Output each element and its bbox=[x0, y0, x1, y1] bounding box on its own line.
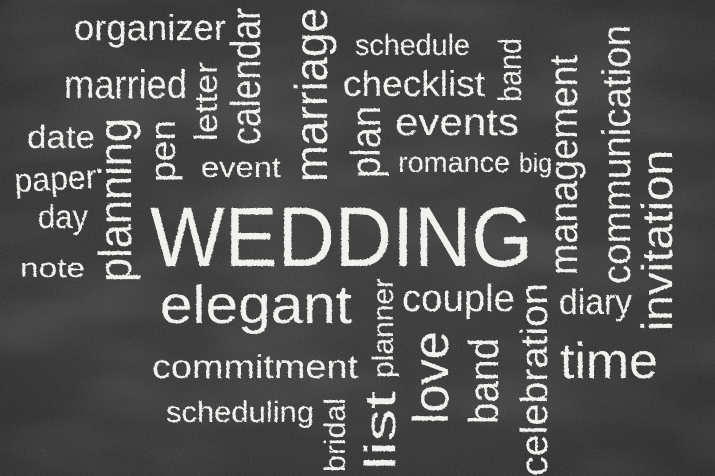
word: married: married bbox=[64, 63, 187, 107]
word: time: time bbox=[560, 333, 658, 389]
word: elegant: elegant bbox=[160, 275, 352, 335]
word: band (vertical, bottom): band bbox=[460, 338, 507, 424]
word: management (vertical): management bbox=[542, 55, 586, 275]
word: plan (vertical): plan bbox=[342, 106, 389, 178]
word: invitation (vertical): invitation bbox=[633, 150, 682, 331]
word: bridal (vertical): bridal bbox=[319, 398, 352, 472]
word: marriage (vertical): marriage bbox=[285, 8, 337, 182]
word: scheduling: scheduling bbox=[166, 396, 314, 429]
word: paper: paper bbox=[13, 158, 97, 199]
word: schedule: schedule bbox=[355, 29, 470, 62]
word: letter (vertical): letter bbox=[188, 62, 224, 141]
word: couple: couple bbox=[402, 278, 515, 320]
word: pen (vertical): pen bbox=[142, 120, 183, 182]
word: big: big bbox=[519, 148, 552, 178]
word: planner (vertical): planner bbox=[367, 278, 400, 378]
word: list (vertical): list bbox=[356, 391, 405, 470]
word: event: event bbox=[201, 152, 281, 184]
word: planning (vertical): planning bbox=[89, 118, 141, 282]
word: diary: diary bbox=[559, 281, 632, 322]
title word: WEDDING: WEDDING bbox=[150, 190, 533, 284]
word: romance: romance bbox=[398, 147, 510, 179]
word: commitment: commitment bbox=[152, 348, 358, 385]
word: communication (vertical): communication bbox=[595, 25, 639, 284]
word: love (vertical): love bbox=[403, 331, 459, 424]
word: events: events bbox=[395, 102, 519, 144]
word: day: day bbox=[38, 198, 88, 235]
word: date: date bbox=[27, 119, 95, 155]
word: note: note bbox=[20, 253, 85, 283]
word: celebration (vertical): celebration bbox=[514, 283, 556, 476]
word: organizer: organizer bbox=[74, 7, 226, 48]
word: checklist: checklist bbox=[343, 63, 485, 104]
word: band (vertical, top): band bbox=[492, 38, 528, 102]
